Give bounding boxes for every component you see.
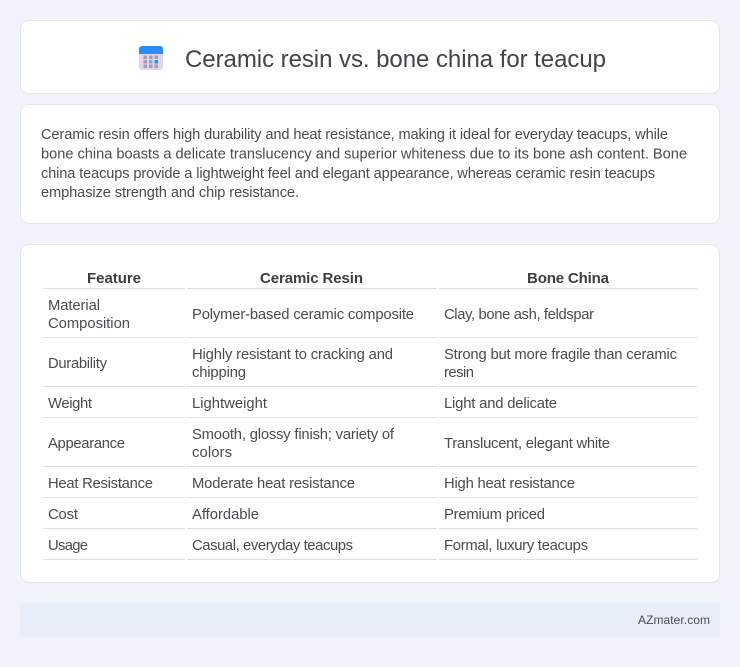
summary text: bone china boasts a delicate translucency and superior whiteness due to its bone ash content. Bone xyxy=(41,146,687,162)
row: material composition xyxy=(48,298,594,332)
table header: Feature xyxy=(87,270,141,287)
row: weight: Lightweight xyxy=(192,396,267,412)
row: durability: Strong but more fragile than ceramic xyxy=(444,347,678,363)
table rules xyxy=(43,288,697,560)
row: material composition: Clay, bone ash, feldspar xyxy=(444,307,594,323)
row: appearance: colors xyxy=(192,445,232,461)
row: cost: Affordable xyxy=(192,507,259,523)
summary text: china teacups provide a lightweight feel and elegant appearance, whereas ceramic resin teacups xyxy=(41,166,655,182)
row: weight: Light and delicate xyxy=(444,396,557,412)
row: heat resistance xyxy=(48,476,575,492)
row: usage: Usage xyxy=(48,538,88,554)
summary text xyxy=(41,127,687,201)
row: appearance: Translucent, elegant white xyxy=(444,436,610,452)
row: material composition: Material xyxy=(48,298,100,314)
row: weight: Weight xyxy=(48,396,92,412)
table header xyxy=(87,270,610,287)
row: heat resistance: High heat resistance xyxy=(444,476,575,492)
row: usage: Casual, everyday teacups xyxy=(192,538,353,554)
row: durability: Highly resistant to cracking and xyxy=(192,347,393,363)
summary text: emphasize strength and chip resistance. xyxy=(41,185,299,201)
row: durability: chipping xyxy=(192,365,246,381)
table header: Bone China xyxy=(527,270,610,287)
row: appearance: Smooth, glossy finish; variety of xyxy=(192,427,395,443)
row: cost xyxy=(48,507,545,523)
row: weight xyxy=(48,396,557,412)
row: appearance xyxy=(48,427,610,461)
title: Ceramic resin vs. bone china for teacup xyxy=(185,46,606,73)
row: cost: Cost xyxy=(48,507,78,523)
footer bar xyxy=(20,603,720,637)
row: usage xyxy=(48,538,588,554)
summary text: Ceramic resin offers high durability and heat resistance, making it ideal for everyday teacups, while xyxy=(41,127,668,143)
row: appearance: Appearance xyxy=(48,436,125,452)
panel: title card xyxy=(20,20,720,94)
row: cost: Premium priced xyxy=(444,507,545,523)
row: durability: Durability xyxy=(48,356,108,372)
row: material composition: Polymer-based ceramic composite xyxy=(192,307,414,323)
row: heat resistance: Moderate heat resistance xyxy=(192,476,355,492)
row: heat resistance: Heat Resistance xyxy=(48,476,153,492)
row: durability xyxy=(48,347,678,381)
panel: summary xyxy=(20,104,720,224)
table header: Ceramic Resin xyxy=(260,270,363,287)
panel: comparison table xyxy=(20,244,720,582)
footer credit: AZmater.com xyxy=(638,613,710,627)
icon: calendar xyxy=(139,46,163,70)
row: usage: Formal, luxury teacups xyxy=(444,538,588,554)
row: material composition: Composition xyxy=(48,316,130,332)
row: durability: resin xyxy=(444,365,474,381)
